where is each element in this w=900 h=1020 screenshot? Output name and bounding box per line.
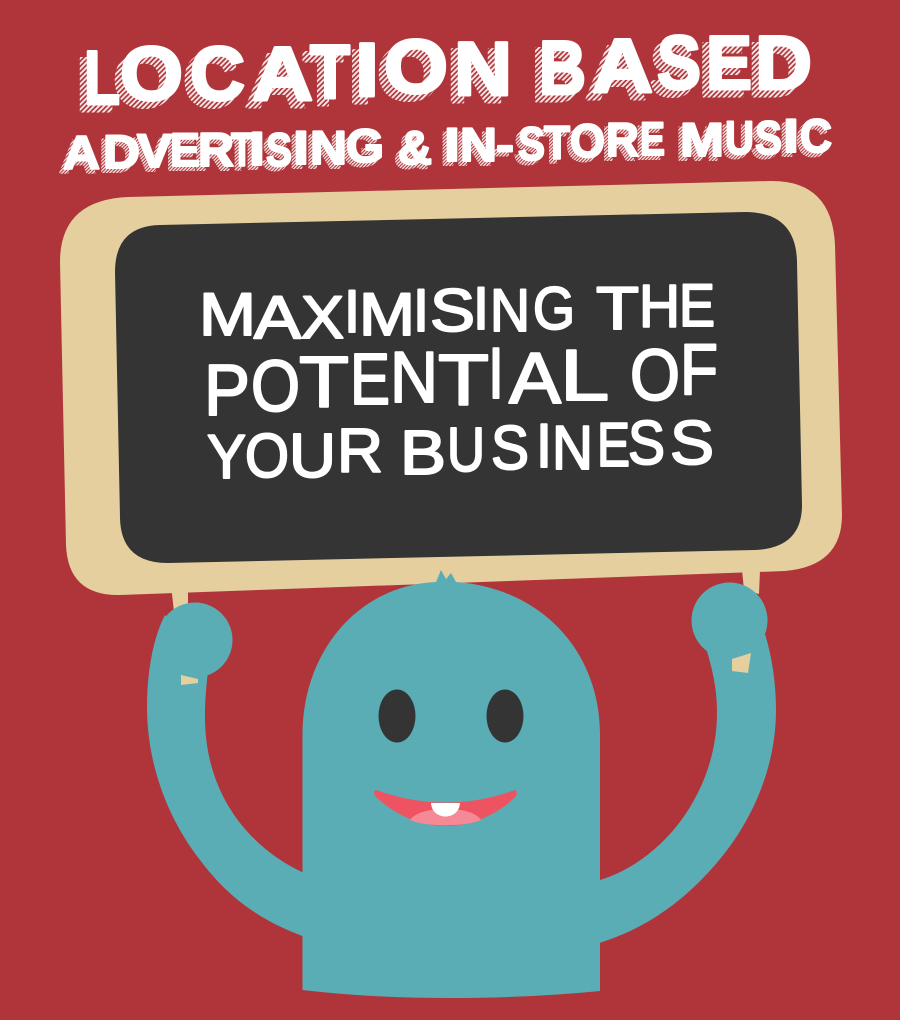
- heading: location based: I: [348, 35, 372, 120]
- chalk text: I: [344, 278, 360, 345]
- heading: location based: E: [699, 28, 745, 113]
- chalk text: O: [251, 347, 300, 427]
- chalk text: S: [491, 414, 529, 483]
- right arm: [585, 625, 776, 947]
- heading: advertising and in-store music: O: [570, 114, 605, 167]
- heading: advertising and in-store music: E: [166, 127, 196, 180]
- heading: advertising and in-store music: S: [266, 123, 292, 176]
- heading: advertising and in-store music: E: [170, 123, 200, 176]
- heading: advertising and in-store music: -: [492, 122, 510, 175]
- heading: location based: O: [113, 39, 176, 124]
- heading: advertising and in-store music: T: [227, 127, 249, 180]
- heading: advertising and in-store music: E: [636, 116, 661, 169]
- chalk text: N: [390, 338, 438, 418]
- chalkboard: [115, 212, 802, 563]
- chalk text: H: [639, 273, 680, 340]
- heading: advertising and in-store music: M: [680, 113, 724, 166]
- heading: advertising and in-store music: I: [245, 126, 261, 179]
- heading: advertising and in-store music: V: [133, 128, 169, 181]
- heading: location based: O: [384, 25, 448, 110]
- heading: advertising and in-store music: C: [800, 109, 832, 162]
- tongue: [410, 809, 481, 825]
- chalk text: S: [430, 277, 475, 344]
- heading: advertising and in-store music: R: [606, 113, 639, 166]
- sign posts: [171, 570, 760, 612]
- heading: location based: C: [183, 39, 238, 124]
- chalk text: [199, 272, 718, 492]
- heading: advertising and in-store music: [59, 109, 832, 183]
- heading: location based: B: [539, 26, 586, 111]
- chalk text: M: [359, 281, 415, 348]
- chalk text: S: [628, 409, 665, 478]
- heading: advertising and in-store music: I: [440, 122, 456, 175]
- heading: advertising and in-store music: N: [456, 122, 493, 175]
- chalk text: O: [630, 336, 680, 416]
- chalk text: X: [301, 284, 344, 351]
- heading: location based: S: [657, 21, 701, 106]
- sign board: [60, 181, 842, 595]
- left post behind hand: [181, 675, 198, 685]
- chalk text: N: [490, 277, 530, 344]
- heading: advertising and in-store music: A: [59, 130, 96, 183]
- chalk text: T: [438, 341, 489, 421]
- heading: advertising and in-store music: R: [198, 123, 234, 176]
- heading: advertising and in-store music: S: [514, 121, 541, 174]
- heading: location based: N: [454, 27, 512, 112]
- chalk text: B: [400, 419, 446, 488]
- chalk text: A: [509, 339, 561, 419]
- heading: advertising and in-store music: A: [63, 126, 100, 179]
- heading: advertising and in-store music: G: [342, 123, 380, 176]
- heading: advertising and in-store music: E: [640, 112, 665, 165]
- title: [59, 21, 832, 183]
- heading: advertising and in-store music: R: [194, 127, 230, 180]
- chalk text: I: [488, 334, 504, 414]
- heading: advertising and in-store music: I: [249, 122, 265, 175]
- character: [147, 570, 776, 998]
- heading: advertising and in-store music: S: [262, 127, 288, 180]
- heading: location based: A: [252, 32, 313, 117]
- chalk text: O: [245, 422, 289, 491]
- heading: location based: N: [447, 34, 505, 119]
- heading: location based: A: [245, 39, 306, 124]
- heading: advertising and in-store music: S: [518, 117, 545, 170]
- heading: location based: D: [755, 21, 812, 106]
- heading: advertising and in-store music: D: [99, 129, 136, 182]
- heading: advertising and in-store music: U: [725, 111, 754, 164]
- heading: location based: O: [120, 32, 183, 117]
- heading: location based: T: [310, 30, 350, 115]
- chalk text: Y: [207, 423, 246, 492]
- heading: location based: C: [190, 32, 245, 117]
- mouth: [374, 790, 517, 826]
- heading: advertising and in-store music: I: [779, 113, 795, 166]
- heading: advertising and in-store music: M: [676, 117, 720, 170]
- heading: advertising and in-store music: N: [460, 118, 497, 171]
- heading: advertising and in-store music: R: [602, 117, 635, 170]
- heading: advertising and in-store music: C: [796, 113, 828, 166]
- heading: advertising and in-store music: S: [751, 115, 778, 168]
- heading: advertising and in-store music: S: [755, 111, 782, 164]
- chalk text: E: [597, 411, 630, 480]
- tooth: [431, 803, 460, 816]
- heading: advertising and in-store music: &: [394, 125, 428, 178]
- heading: advertising and in-store music: &: [398, 121, 432, 174]
- heading: location based: A: [592, 24, 653, 109]
- heading: advertising and in-store music: O: [566, 118, 601, 171]
- left eye: [378, 690, 416, 742]
- heading: advertising and in-store music: N: [306, 125, 343, 178]
- heading: advertising and in-store music: T: [231, 123, 253, 176]
- heading: advertising and in-store music: I: [783, 109, 799, 162]
- chalk text: A: [254, 284, 301, 351]
- chalk text: I: [536, 412, 552, 481]
- chalk text: M: [199, 281, 256, 348]
- left hand: [158, 602, 232, 678]
- chalk text: I: [413, 277, 429, 344]
- chalk text: T: [596, 275, 639, 342]
- right hand: [692, 582, 768, 658]
- heading: location based: B: [532, 33, 579, 118]
- chalk text: S: [670, 409, 714, 478]
- chalk text: I: [473, 275, 489, 342]
- chalk text: N: [552, 414, 593, 483]
- chalk text: F: [680, 330, 718, 410]
- heading: location based: A: [585, 31, 646, 116]
- chalk text: E: [679, 272, 715, 339]
- heading: location based: L: [84, 36, 120, 121]
- chalk text: R: [337, 417, 383, 486]
- right eye: [486, 690, 524, 742]
- heading: location based: I: [355, 28, 379, 113]
- heading: location based: O: [377, 32, 441, 117]
- heading: advertising and in-store music: I: [444, 118, 460, 171]
- heading: advertising and in-store music: T: [540, 120, 566, 173]
- heading: advertising and in-store music: N: [310, 121, 347, 174]
- heading: location based: D: [748, 28, 805, 113]
- heading: location based: E: [706, 21, 752, 106]
- heading: location based: [77, 21, 812, 128]
- chalk text: E: [350, 340, 390, 420]
- chalk text: G: [533, 275, 575, 342]
- heading: advertising and in-store music: D: [103, 125, 140, 178]
- heading: advertising and in-store music: U: [721, 115, 750, 168]
- heading: advertising and in-store music: V: [137, 124, 173, 177]
- heading: advertising and in-store music: G: [346, 119, 384, 172]
- body: [302, 570, 600, 998]
- chalk text: T: [299, 343, 349, 423]
- heading: advertising and in-store music: -: [496, 118, 514, 171]
- chalk text: U: [447, 416, 485, 485]
- heading: location based: L: [77, 43, 113, 128]
- heading: advertising and in-store music: T: [544, 116, 570, 169]
- heading: advertising and in-store music: I: [289, 125, 305, 178]
- chalk text: L: [560, 336, 607, 416]
- heading: location based: T: [303, 37, 343, 122]
- chalk text: P: [204, 351, 250, 431]
- left arm: [147, 615, 320, 942]
- right post behind hand: [732, 653, 751, 673]
- heading: advertising and in-store music: I: [293, 121, 309, 174]
- chalk text: U: [289, 422, 336, 491]
- heading: location based: S: [650, 28, 694, 113]
